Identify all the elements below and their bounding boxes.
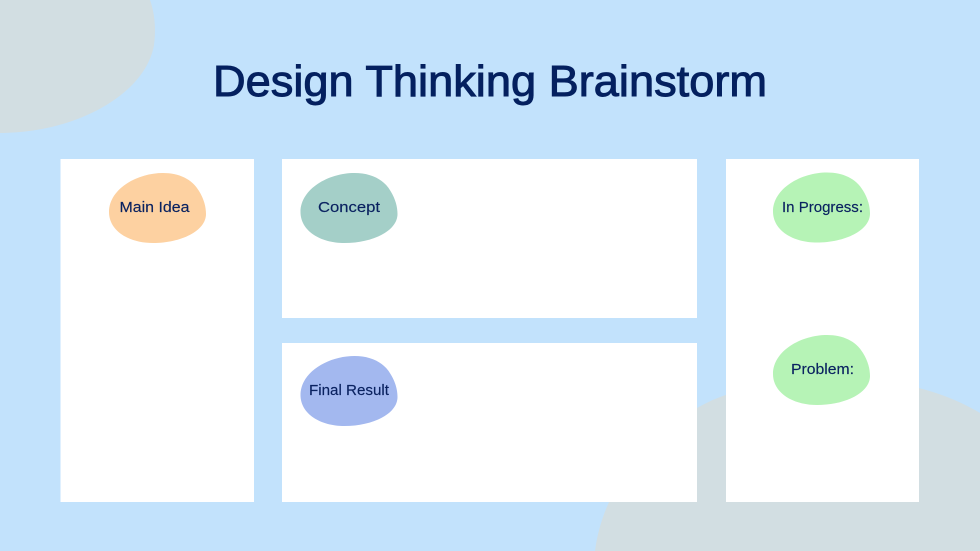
background blob: bottom right	[595, 379, 980, 551]
badge: problem	[773, 335, 870, 405]
badge: concept: Concept	[318, 199, 381, 216]
panel: status	[726, 159, 919, 502]
panel: concept	[282, 159, 697, 318]
badge: final result: Final Result	[309, 382, 390, 399]
panel: final result	[282, 343, 697, 502]
badge: in progress	[773, 172, 870, 242]
badge: in progress: In Progress:	[782, 199, 863, 216]
badge: final result	[300, 356, 398, 426]
background blob: top left	[0, 0, 155, 133]
badge: main idea: Main Idea	[120, 199, 190, 216]
badge: concept	[300, 173, 398, 243]
badge: problem: Problem:	[791, 361, 854, 378]
badge: main idea	[109, 173, 206, 243]
title: Design Thinking Brainstorm	[213, 57, 767, 106]
panel: main idea	[60, 159, 254, 502]
